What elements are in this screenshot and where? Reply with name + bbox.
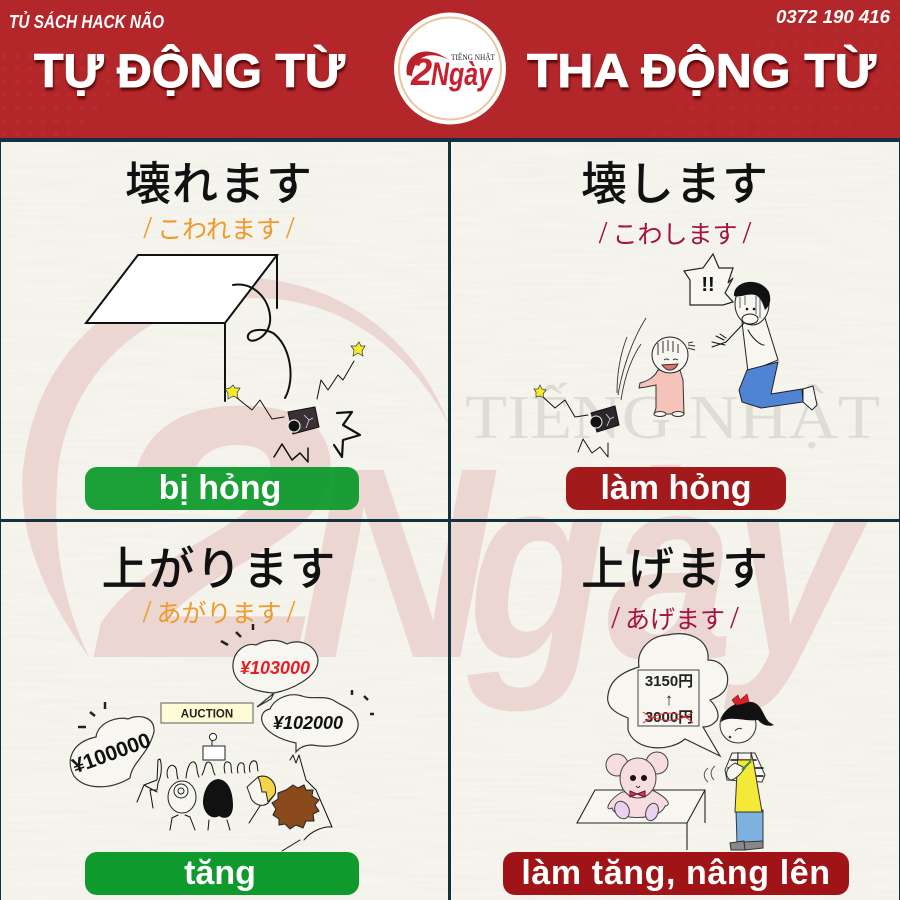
heading: 上げます — [581, 543, 769, 595]
background watermark logo: N — [296, 411, 500, 715]
label pill: làm tăng, nâng lên — [521, 854, 831, 892]
heading: 上がります — [102, 543, 336, 595]
illustration: baby throws camera, father shocked — [534, 254, 817, 457]
bid bubble 103000 — [233, 640, 318, 707]
panel: 上げます — [503, 543, 849, 895]
label pill — [85, 852, 359, 895]
reading: /こわします/ — [599, 214, 752, 250]
thought bubble with prices: 3150円 — [645, 673, 693, 690]
illustration: auction — [69, 624, 374, 851]
phone number: 0372 190 416 — [776, 7, 891, 27]
panel: 壊します — [534, 158, 817, 510]
series name: TỦ SÁCH HACK NÃO — [9, 11, 164, 32]
label pill — [566, 467, 786, 510]
label pill: tăng — [184, 854, 256, 892]
panel: 上がります — [69, 543, 374, 895]
auctioneer and crowd — [137, 733, 332, 851]
bid bubble 103000: ¥103000 — [240, 658, 310, 678]
table — [577, 790, 705, 850]
reading: /こわれます/ — [143, 209, 295, 245]
bid bubble 102000: ¥102000 — [273, 713, 343, 733]
logo — [394, 12, 506, 124]
thought bubble with prices: 3000円 — [645, 709, 693, 726]
panel: 壊れます — [85, 158, 365, 510]
label pill: làm hỏng — [600, 469, 752, 507]
illustration: camera falls off table — [86, 255, 365, 462]
teddy bear — [606, 752, 668, 823]
illustration: baby throws camera, father shocked: !! — [701, 274, 715, 296]
bid bubble 102000 — [262, 695, 358, 752]
thought bubble with prices — [608, 634, 728, 756]
reading: /あがります/ — [143, 593, 296, 629]
background watermark logo: TIẾNG NHẬT — [465, 383, 880, 452]
shop girl — [704, 694, 774, 850]
label pill: bị hỏng — [159, 469, 281, 507]
background watermark logo: 2 — [93, 332, 335, 734]
bid bubble 100000: ¥100000 — [69, 729, 154, 778]
thought bubble with prices: ↑ — [665, 690, 673, 709]
heading left: TỰ ĐỘNG TỪ — [34, 44, 345, 97]
reading: /あげます/ — [611, 599, 739, 635]
auction sign: AUCTION — [181, 708, 233, 720]
logo: TIẾNG NHẬT — [451, 52, 495, 62]
logo: 2 — [410, 52, 432, 94]
background watermark logo — [22, 277, 880, 734]
logo: Ngày — [431, 56, 494, 92]
heading right: THA ĐỘNG TỪ — [527, 44, 876, 97]
heading: 壊します — [581, 158, 769, 210]
heading: 壊れます — [125, 158, 313, 210]
label pill — [85, 467, 359, 510]
auction sign — [161, 703, 253, 723]
header band — [0, 0, 900, 138]
illustration: shop raises the price — [577, 634, 774, 850]
